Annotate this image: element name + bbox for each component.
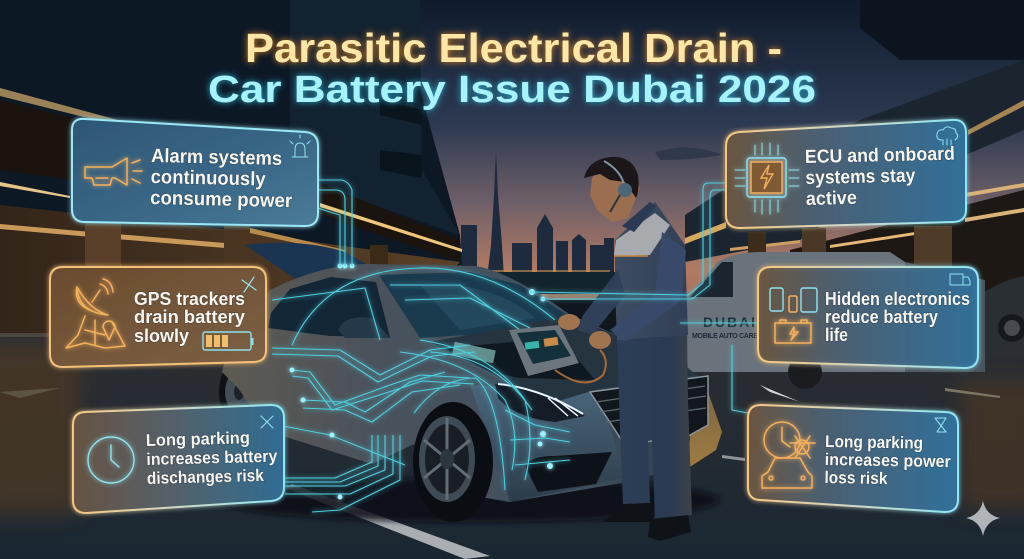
title: Car Battery Issue Dubai 2026	[208, 69, 816, 111]
panel: alarm systems	[72, 119, 318, 226]
panel text: ECU	[805, 144, 956, 210]
panel: GPS trackers	[50, 267, 266, 367]
panel text: alarm: Alarm systems	[151, 145, 282, 170]
panel text: ECU: ECU and onboard	[805, 144, 955, 168]
background: Dubai skyline	[420, 150, 620, 294]
icon: siren	[290, 135, 310, 157]
mechanic: near arm	[578, 270, 625, 335]
icon: clock	[88, 437, 134, 483]
icon: horn	[85, 158, 142, 185]
mechanic	[558, 157, 692, 541]
connector lines: right panels to car	[530, 183, 760, 413]
background: parked car at right	[972, 276, 1024, 345]
icon: low battery	[203, 332, 254, 350]
diagnostic tablet	[509, 325, 606, 382]
icon: car with clock and web	[762, 422, 815, 488]
icon: delivery van	[950, 274, 970, 285]
car: hood	[430, 316, 698, 405]
panel: ECU	[726, 120, 966, 228]
panel text: alarm: continuously	[150, 166, 266, 191]
road marking	[285, 484, 490, 559]
car: windscreen	[379, 272, 569, 338]
car: body	[222, 264, 722, 502]
car: side windows	[268, 277, 390, 337]
car: front bumper intake	[525, 452, 612, 492]
panel: hidden electronics	[758, 267, 978, 368]
panel text: long parking power: Long parking	[825, 432, 923, 453]
road marking: right	[722, 455, 745, 461]
mechanic: torso	[615, 202, 688, 340]
panel text: alarm	[150, 145, 294, 212]
icon: chip	[735, 143, 799, 214]
mechanic: headset	[604, 161, 632, 212]
panel text: hidden: Hidden electronics	[825, 289, 970, 309]
panel text: ECU: systems stay	[805, 165, 916, 189]
panel text: alarm: consume power	[150, 187, 293, 212]
car: rear wheel	[219, 358, 263, 426]
icon: battery	[775, 320, 811, 343]
icon: sparkle watermark	[966, 501, 1000, 536]
car: side mirror	[338, 317, 390, 338]
title: Parasitic Electrical Drain -	[245, 25, 782, 71]
background: left parking garage	[0, 0, 462, 337]
mechanic: hands	[558, 314, 580, 330]
car: engine bay	[445, 338, 595, 380]
icon: tools	[242, 277, 256, 292]
panel text: long parking power	[824, 432, 952, 489]
icon: devices	[770, 288, 817, 312]
panel: long parking battery	[73, 405, 284, 513]
panel text: hidden	[825, 289, 970, 345]
icon: hourglass	[935, 418, 946, 432]
background: warm reflections on ground	[0, 345, 1024, 515]
mechanic: collar	[622, 202, 656, 232]
van: Dubai mobile auto care: DUBAI	[703, 314, 755, 330]
car	[219, 243, 722, 522]
panel text: ECU: active	[806, 188, 857, 210]
panel text: hidden: life	[825, 325, 848, 345]
title	[208, 25, 816, 111]
background: right parking garage	[685, 0, 1024, 300]
background: parking ground	[0, 335, 1024, 559]
van: Dubai mobile auto care: MOBILE AUTO CARE	[692, 333, 758, 340]
panel text: long parking battery: Long parking	[146, 428, 250, 450]
background: dusk sky	[0, 0, 1024, 300]
panel text: GPS	[134, 288, 246, 346]
car: headlight	[495, 384, 585, 422]
panel text: GPS: drain battery	[134, 306, 246, 327]
panel text: long parking power: increases power	[825, 450, 951, 471]
panel text: long parking battery: dischanges risk	[147, 466, 265, 488]
mechanic: head	[590, 160, 640, 222]
car: raised trunk lid	[245, 243, 368, 282]
mechanic: shoes	[603, 503, 654, 522]
panel text: long parking power: loss risk	[824, 468, 888, 488]
panel text: GPS: GPS trackers	[134, 288, 245, 309]
mechanic: shoulder yoke	[614, 213, 670, 256]
car: front fender and bumper	[470, 385, 625, 502]
icon: cloud	[937, 127, 958, 145]
icon: satellite dish and map	[66, 279, 125, 348]
car: grille	[590, 376, 708, 445]
mechanic: legs	[617, 330, 692, 518]
panel text: long parking battery	[146, 428, 279, 488]
car: glowing circuit traces	[262, 268, 570, 512]
background: cloud	[655, 148, 722, 160]
car: front wheel	[413, 402, 493, 522]
panel text: GPS: slowly	[134, 325, 190, 346]
connector lines: left panels to car	[318, 180, 352, 266]
panel: long parking power	[748, 405, 958, 512]
car: gold bumper reflection	[682, 385, 722, 472]
icon: wrench cross	[261, 416, 273, 428]
van: Dubai mobile auto care	[685, 252, 985, 389]
mechanic: far arm	[610, 232, 686, 342]
panel text: hidden: reduce battery	[825, 307, 938, 327]
panel text: long parking battery: increases battery	[146, 447, 278, 469]
